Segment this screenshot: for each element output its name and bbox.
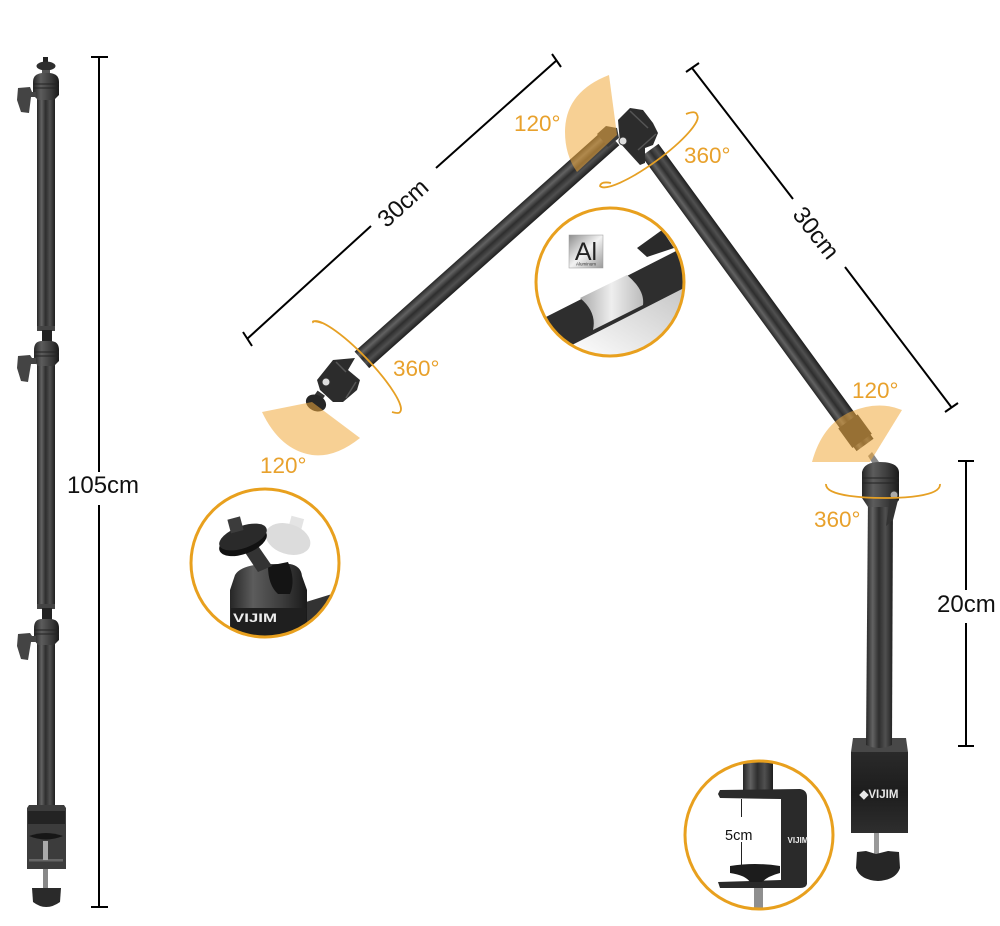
dimension: 105cm <box>67 57 139 907</box>
label: 360° right: 360° <box>814 507 861 532</box>
rotation sector: top 120° <box>565 75 617 172</box>
swivel slot <box>268 562 293 594</box>
top mount screw <box>36 57 56 74</box>
rotation sector: right 120° <box>812 405 902 462</box>
5cm label: 5cm <box>725 828 752 844</box>
callout ring <box>685 761 833 909</box>
base body <box>230 564 307 627</box>
label: 120° top: 120° <box>514 111 561 136</box>
dimension: right 30cm <box>686 63 958 412</box>
tube reflection <box>578 289 682 354</box>
tube <box>546 251 682 344</box>
aluminum badge: Al <box>575 238 597 266</box>
articulated arm assembly <box>303 108 908 881</box>
label: 360° top: 360° <box>684 143 731 168</box>
arm segment right <box>640 143 875 452</box>
ghost ball head <box>266 516 310 555</box>
5cm line <box>741 799 742 865</box>
lower left head joint <box>303 358 360 415</box>
desk clamp: ◆VIJIM <box>859 789 898 801</box>
aluminum badge: Aluminum <box>576 262 596 266</box>
post top joint <box>862 452 899 526</box>
dimension: 105cm: 105cm <box>67 472 139 499</box>
callout: aluminum tube detail <box>536 208 690 360</box>
silver band <box>580 275 643 330</box>
pole section middle <box>37 364 55 606</box>
dimension: left 30cm <box>243 54 561 346</box>
desk clamp <box>851 738 908 881</box>
label: 360° left: 360° <box>393 356 440 381</box>
threaded screw <box>754 888 763 908</box>
callout ring <box>536 208 684 356</box>
clamp bracket <box>718 789 807 888</box>
pole section upper <box>37 98 55 328</box>
ball stem <box>246 547 272 572</box>
dimension: right 30cm: 30cm <box>787 202 844 265</box>
clip lever <box>637 230 674 257</box>
logo: VIJIM <box>788 836 809 845</box>
logo: VIJIM <box>233 611 277 625</box>
pressure disk <box>730 864 780 882</box>
rod <box>743 760 773 790</box>
rotation ring: top 360° <box>600 112 698 187</box>
label: 120° lower left: 120° <box>260 453 307 478</box>
vertical post <box>866 498 893 748</box>
pole section lower <box>37 644 55 806</box>
rotation ring: bottom 360° <box>826 484 940 498</box>
top lever <box>17 87 36 113</box>
callout ring <box>191 489 339 637</box>
callout: clamp detail <box>685 760 833 912</box>
dimension: 20cm: 20cm <box>937 591 996 618</box>
middle joint <box>17 326 59 382</box>
dimension: 20cm <box>937 461 996 746</box>
thumb knob <box>219 524 267 556</box>
dimension: left 30cm: 30cm <box>372 174 434 233</box>
rotation sector: lower left 120° <box>262 402 360 455</box>
top joint <box>33 73 59 100</box>
callout: ball head detail <box>191 489 339 640</box>
lower joint <box>17 604 59 660</box>
rotation ring: left 360° <box>313 321 401 413</box>
folded stand at full height <box>17 57 66 907</box>
side bracket <box>307 594 330 622</box>
label: 120° right: 120° <box>852 378 899 403</box>
arm segment left <box>355 129 619 368</box>
side clamp <box>27 805 66 907</box>
mount screw <box>227 516 244 533</box>
top elbow joint <box>597 108 658 165</box>
aluminum badge <box>569 235 603 268</box>
